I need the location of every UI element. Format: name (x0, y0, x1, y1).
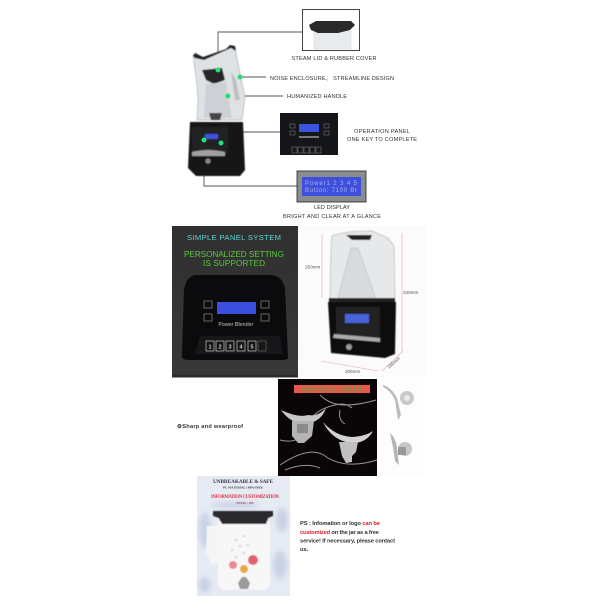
callout: LED display image: Power1 2 3 4 5 (305, 181, 358, 187)
text: customization note: PS : Infomation or logo can be (300, 521, 381, 527)
red label bar (294, 385, 370, 393)
callout label: operation panel (347, 129, 417, 143)
heading: personalized setting: PERSONALIZED SETTING (184, 250, 284, 259)
callout label: LED display: LED DISPLAY (314, 205, 350, 211)
dimension labels: 180mm (386, 356, 401, 370)
text: sharp and wearproof: ⚙Sharp and wearproof (177, 423, 243, 430)
callout: LED display image: Button: 7100 Br (305, 188, 357, 194)
callout label: noise enclosure: NOISE ENCLOSURE、 STREAMLINE DESIGN (270, 76, 394, 82)
panel: blade section (172, 375, 424, 476)
control panel: 2 (218, 344, 222, 350)
blade left (281, 408, 326, 443)
poster heading: UNBREAKABLE & SAFE (213, 479, 273, 485)
dimension labels: 205mm (345, 369, 360, 374)
dimension labels: 340mm (403, 290, 418, 295)
callout label: operation panel: OPERATION PANEL (354, 129, 410, 135)
callout label: LED display: BRIGHT AND CLEAR AT A GLANCE (283, 214, 381, 220)
text: customization note (300, 521, 395, 553)
control panel: 1 (208, 344, 212, 350)
callout label: steam lid: STEAM LID & RUBBER COVER (292, 56, 376, 62)
blade photos, side (378, 379, 424, 476)
callout: operation panel image (280, 113, 338, 155)
text: customization note: service! If necessary, please contact (300, 538, 395, 544)
jar (206, 511, 273, 590)
blade right (323, 422, 373, 463)
panel: blender feature callouts (188, 10, 417, 220)
green marker dots (202, 68, 242, 146)
control panel: 5 (250, 344, 254, 350)
panel: jar customization (197, 476, 395, 596)
dimension lines (321, 233, 403, 371)
callout label: operation panel: ONE KEY TO COMPLETE (347, 137, 417, 143)
blade photo (278, 379, 377, 476)
callout label: handle: HUMANIZED HANDLE (287, 94, 347, 100)
dimension labels: 250mm (305, 264, 320, 270)
panel: simple panel system (172, 226, 298, 377)
heading: personalized setting: IS SUPPORTED (203, 259, 265, 268)
divider bar (172, 375, 298, 378)
poster heading (211, 479, 280, 505)
control panel (182, 275, 288, 360)
panel: blender dimensions (298, 226, 426, 377)
text: customization note: us. (300, 547, 309, 553)
base (188, 122, 245, 176)
callout: LED display image (297, 171, 366, 202)
enclosure (193, 46, 245, 120)
control panel: 3 (228, 344, 232, 350)
poster heading: INFORMATION CUSTOMIZATION (211, 495, 280, 500)
blade photo: HARD BLADE 1:BEST IT (302, 387, 362, 393)
dimension labels (305, 264, 418, 374)
control panel: Power Blender (218, 322, 254, 328)
heading: personalized setting (184, 250, 284, 268)
jar poster (197, 476, 290, 596)
control panel: 4 (239, 344, 243, 350)
poster heading: PC MATERIAL | BPA FREE (223, 486, 264, 490)
connector lines (204, 32, 302, 186)
blender product image (188, 45, 245, 176)
heading: simple panel system: SIMPLE PANEL SYSTEM (187, 233, 281, 242)
text: customization note: customized on the jar as a free (300, 530, 380, 536)
blender photo (328, 231, 396, 358)
callout: steam lid image (302, 10, 360, 50)
callout label: LED display (283, 205, 381, 220)
poster heading: PS250 / NB (236, 501, 254, 505)
